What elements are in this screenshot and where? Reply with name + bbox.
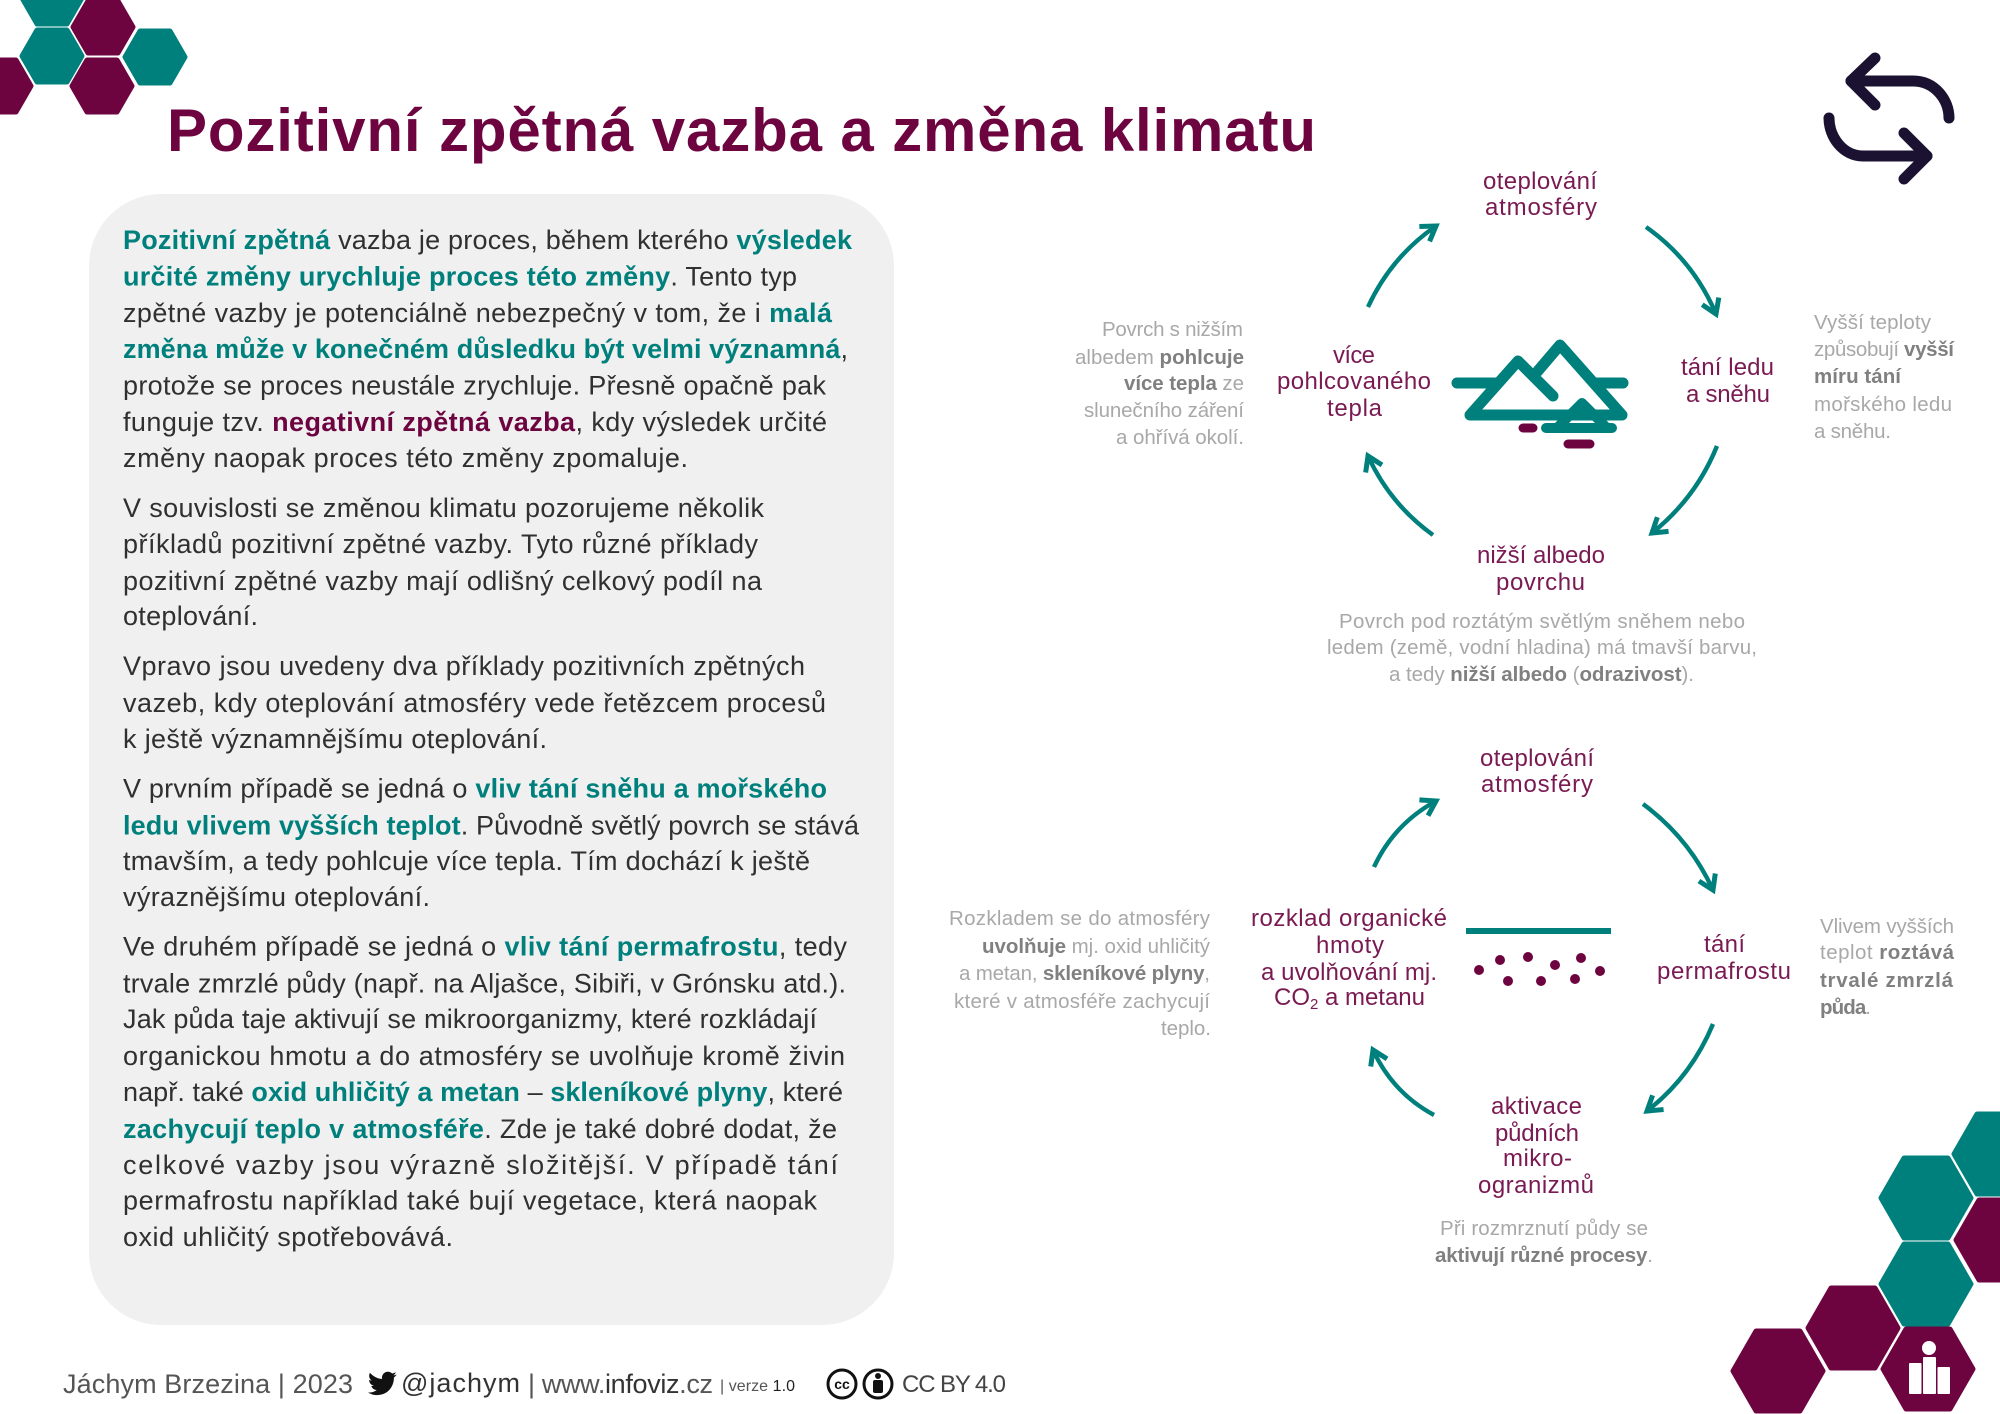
- note: povrch s nižším albedem: slunečního záření: [1084, 399, 1244, 422]
- label: rozklad organické hmoty: hmoty: [1316, 932, 1384, 959]
- label: nižší albedo povrchu: [1477, 542, 1605, 596]
- note: rozkladem se do atmosféry: a metan, skleníkové plyny,: [959, 962, 1210, 985]
- label: nižší albedo povrchu: nižší albedo: [1477, 542, 1605, 569]
- note: vlivem vyšších teplot: teplot roztává: [1820, 941, 1955, 964]
- label: rozklad organické hmoty: rozklad organické: [1251, 905, 1447, 932]
- note: vyšší teploty: [1814, 311, 1955, 443]
- paragraph 2: [123, 493, 764, 631]
- paragraph 3: Vpravo jsou uvedeny dva příklady pozitivních zpětných: [123, 651, 805, 681]
- paragraph 2: příkladů pozitivní zpětné vazby. Tyto různé příklady: [123, 529, 758, 559]
- note: povrch pod roztátým sněhem: Povrch pod roztátým světlým sněhem nebo: [1339, 610, 1745, 633]
- paragraph 1: určité změny urychluje proces této změny. Tento typ: [123, 262, 797, 292]
- paragraph 4: [123, 774, 860, 912]
- paragraph 5: trvale zmrzlé půdy (např. na Aljašce, Sibiři, v Grónsku atd.).: [123, 968, 846, 998]
- note: povrch s nižším albedem: Povrch s nižším: [1102, 318, 1243, 341]
- note: povrch pod roztátým sněhem: a tedy nižší albedo (odrazivost).: [1389, 663, 1694, 686]
- note: povrch pod roztátým sněhem: [1327, 610, 1757, 686]
- note: vyšší teploty: Vyšší teploty: [1814, 311, 1932, 334]
- label: oteplování atmosféry: oteplování: [1480, 745, 1594, 772]
- icon: mountains with melting snow: [1457, 345, 1623, 444]
- label: více pohlcovaného tepla: více: [1333, 342, 1375, 369]
- paragraph 5: permafrostu například také bují vegetace, která naopak: [123, 1186, 818, 1216]
- paragraph 1: protože se proces neustále zrychluje. Přesně opačně pak: [123, 370, 826, 400]
- note: povrch s nižším albedem: více tepla ze: [1124, 372, 1244, 395]
- paragraph 3: vazeb, kdy oteplování atmosféry vede řetězcem procesů: [123, 688, 826, 718]
- note: vlivem vyšších teplot: Vlivem vyšších: [1820, 915, 1954, 938]
- note: povrch s nižším albedem: [1075, 318, 1244, 449]
- arrows: albedo loop: [1368, 226, 1717, 535]
- label: více pohlcovaného tepla: pohlcovaného: [1277, 368, 1431, 395]
- author: Jáchym Brzezina | 2023: [63, 1369, 353, 1399]
- paragraph 3: k ještě významnějšímu oteplování.: [123, 724, 547, 754]
- label: tání permafrostu: [1657, 931, 1791, 985]
- paragraph 2: V souvislosti se změnou klimatu pozorujeme několik: [123, 493, 764, 523]
- icon: loop arrows: [1829, 58, 1949, 179]
- decorative hexagons: top left: [0, 0, 185, 112]
- note: při rozmrznutí půdy: [1435, 1217, 1653, 1267]
- note: rozkladem se do atmosféry: teplo.: [1161, 1017, 1211, 1040]
- note: rozkladem se do atmosféry: Rozkladem se do atmosféry: [949, 907, 1211, 930]
- paragraph 1: změny naopak proces této změny zpomaluje.: [123, 443, 688, 473]
- note: rozkladem se do atmosféry: [949, 907, 1211, 1040]
- paragraph 1: zpětné vazby je potenciálně nebezpečný v tom, že i malá: [123, 298, 833, 328]
- label: tání permafrostu: tání: [1704, 931, 1745, 958]
- label: rozklad organické hmoty: [1251, 905, 1447, 1013]
- label: aktivace půdních mikroorganizmů: mikro-: [1503, 1145, 1572, 1172]
- paragraph 2: oteplování.: [123, 601, 258, 631]
- paragraph 4: tmavším, a tedy pohlcuje více tepla. Tím dochází k ještě: [123, 846, 810, 876]
- paragraph 5: celkové vazby jsou výrazně složitější. V případě tání: [123, 1150, 838, 1180]
- version: | verze 1.0: [720, 1378, 795, 1395]
- paragraph 4: V prvním případě se jedná o vliv tání sněhu a mořského: [123, 774, 827, 804]
- paragraph 3: [123, 651, 826, 754]
- note: vyšší teploty: mořského ledu: [1814, 393, 1952, 416]
- note: povrch pod roztátým sněhem: ledem (země, vodní hladina) má tmavší barvu,: [1327, 636, 1757, 659]
- licence: CC BY 4.0: [902, 1371, 1006, 1398]
- label: oteplování atmosféry: [1483, 168, 1597, 221]
- paragraph 1: Pozitivní zpětná vazba je proces, během kterého výsledek: [123, 225, 853, 255]
- paragraph 5: např. také oxid uhličitý a metan – skleníkové plyny, které: [123, 1077, 843, 1107]
- note: vlivem vyšších teplot: půda.: [1820, 996, 1871, 1019]
- title: Pozitivní zpětná vazba a změna klimatu: [167, 97, 1316, 164]
- label: nižší albedo povrchu: povrchu: [1496, 569, 1585, 596]
- arrows: permafrost loop: [1373, 801, 1713, 1115]
- paragraph 5: Jak půda taje aktivují se mikroorganizmy, které rozkládají: [123, 1004, 817, 1034]
- note: povrch s nižším albedem: a ohřívá okolí.: [1116, 426, 1244, 449]
- label: aktivace půdních mikroorganizmů: půdních: [1495, 1120, 1579, 1147]
- paragraph 4: výraznějšímu oteplování.: [123, 882, 430, 912]
- icon: creative commons: cc: [834, 1376, 850, 1392]
- note: povrch s nižším albedem: albedem pohlcuje: [1075, 346, 1244, 369]
- paragraph 1: změna může v konečném důsledku být velmi významná,: [123, 334, 848, 364]
- paragraph 4: ledu vlivem vyšších teplot. Původně světlý povrch se stává: [123, 810, 860, 840]
- icon: twitter bird: [368, 1372, 397, 1395]
- footer: author and licence: [63, 1368, 1006, 1399]
- label: oteplování atmosféry: atmosféry: [1481, 771, 1593, 798]
- label: oteplování atmosféry: oteplování: [1483, 168, 1597, 195]
- note: vyšší teploty: a sněhu.: [1814, 420, 1891, 443]
- icon: creative commons: [828, 1370, 892, 1398]
- decorative hexagons: bottom right: [1733, 1114, 2000, 1411]
- note: vlivem vyšších teplot: trvalé zmrzlá: [1820, 969, 1954, 992]
- note: vlivem vyšších teplot: [1820, 915, 1955, 1019]
- label: tání ledu a sněhu: a sněhu: [1686, 381, 1770, 408]
- website: | www.infoviz.cz: [528, 1369, 713, 1399]
- label: aktivace půdních mikroorganizmů: [1478, 1093, 1594, 1199]
- paragraph 2: pozitivní zpětné vazby mají odlišný celkový podíl na: [123, 566, 763, 596]
- label: více pohlcovaného tepla: tepla: [1327, 395, 1383, 422]
- label: rozklad organické hmoty: a metanu: [1318, 984, 1425, 1011]
- paragraph 5: organickou hmotu a do atmosféry se uvolňuje kromě živin: [123, 1041, 845, 1071]
- note: rozkladem se do atmosféry: uvolňuje mj. oxid uhličitý: [982, 935, 1211, 958]
- paragraph 5: Ve druhém případě se jedná o vliv tání permafrostu, tedy: [123, 932, 848, 962]
- note: při rozmrznutí půdy: Při rozmrznutí půdy se: [1440, 1217, 1648, 1240]
- label: více pohlcovaného tepla: [1277, 342, 1431, 422]
- label: rozklad organické hmoty: a uvolňování mj.: [1261, 959, 1437, 986]
- label: rozklad organické hmoty: CO: [1274, 984, 1310, 1011]
- diagram: albedo feedback loop: [1075, 168, 1955, 686]
- paragraph 1: [123, 225, 853, 473]
- label: aktivace půdních mikroorganizmů: aktivace: [1491, 1093, 1582, 1120]
- label: tání ledu a sněhu: [1681, 354, 1774, 408]
- paragraph 5: oxid uhličitý spotřebovává.: [123, 1222, 453, 1252]
- label: aktivace půdních mikroorganizmů: ogranizmů: [1478, 1172, 1594, 1199]
- note: vyšší teploty: způsobují vyšší: [1814, 338, 1955, 361]
- label: rozklad organické hmoty: 2: [1310, 996, 1318, 1013]
- note: rozkladem se do atmosféry: které v atmosféře zachycují: [954, 990, 1210, 1013]
- panel: explanatory text: [89, 194, 894, 1325]
- note: při rozmrznutí půdy: aktivují různé procesy.: [1435, 1244, 1653, 1267]
- icon: infographic logo: [1909, 1341, 1950, 1394]
- paragraph 5: zachycují teplo v atmosféře. Zde je také dobré dodat, že: [123, 1114, 837, 1144]
- paragraph 1: funguje tzv. negativní zpětná vazba, kdy výsledek určité: [123, 407, 827, 437]
- icon: soil with particles: [1466, 928, 1611, 986]
- diagram: permafrost feedback loop: [949, 745, 1955, 1267]
- label: tání permafrostu: permafrostu: [1657, 958, 1791, 985]
- twitter handle: @jachym: [401, 1368, 520, 1398]
- label: tání ledu a sněhu: tání ledu: [1681, 354, 1774, 381]
- paragraph 5: [123, 932, 848, 1252]
- note: vyšší teploty: míru tání: [1814, 365, 1902, 388]
- label: oteplování atmosféry: atmosféry: [1485, 194, 1597, 221]
- label: oteplování atmosféry: [1480, 745, 1594, 798]
